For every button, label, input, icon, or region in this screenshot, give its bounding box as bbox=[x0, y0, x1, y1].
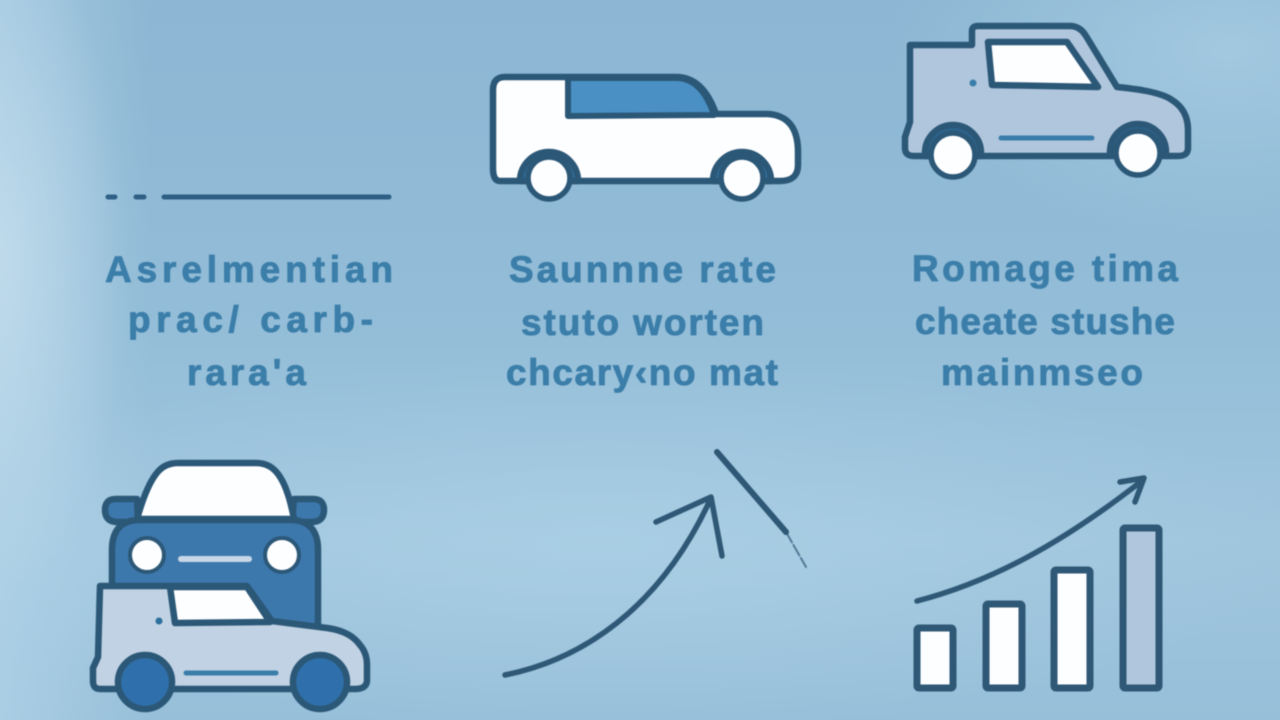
icon: two overlapping cars bbox=[93, 463, 367, 709]
bar chart with trend arrow bbox=[917, 478, 1159, 688]
text block: column two bbox=[506, 249, 778, 393]
bar 1 bbox=[917, 628, 953, 688]
text block: column one: rara'a bbox=[187, 352, 306, 393]
bar 4 bbox=[1123, 528, 1159, 688]
bar 3 bbox=[1054, 570, 1090, 688]
divider dashes bbox=[108, 194, 389, 200]
trend arrow bbox=[917, 478, 1144, 601]
icon: white van bbox=[493, 77, 798, 199]
text block: column three: mainmseo bbox=[941, 352, 1143, 393]
text block: column three: Romage tima bbox=[912, 248, 1178, 289]
text block: column one: Asrelmentian bbox=[105, 249, 393, 290]
text block: column two: chcary‹no mat bbox=[506, 352, 778, 393]
text block: column three: cheate stushe bbox=[915, 301, 1175, 342]
bar 2 bbox=[986, 604, 1022, 688]
text block: column two: stuto worten bbox=[521, 302, 764, 343]
text block: column three bbox=[912, 248, 1178, 393]
text block: column one bbox=[105, 249, 393, 393]
text block: column one: prac/ carb- bbox=[128, 299, 373, 340]
arrow: rising curve bbox=[505, 452, 806, 675]
text block: column two: Saunnne rate bbox=[509, 249, 776, 290]
icon: grey-blue pickup van bbox=[905, 26, 1188, 177]
